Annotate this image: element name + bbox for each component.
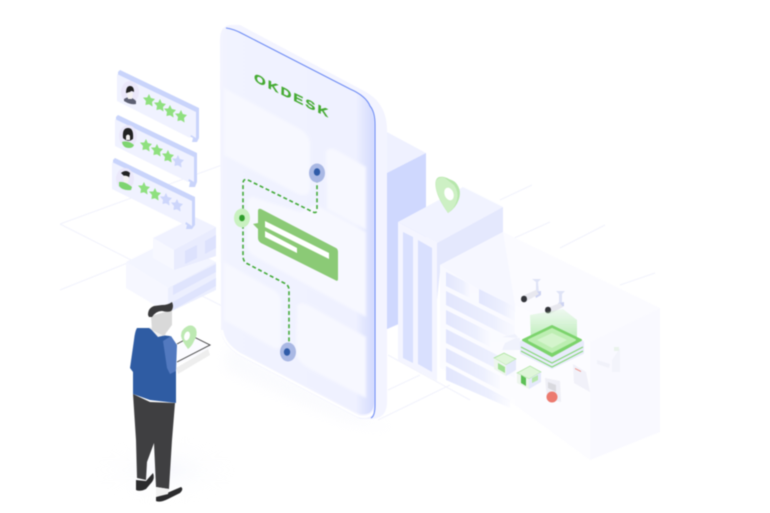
phone white bottom edge (222, 330, 374, 417)
tablet (177, 336, 211, 364)
camera 2 (545, 291, 565, 314)
lower block (126, 240, 216, 313)
sleeve (163, 336, 177, 374)
route pin bottom (280, 342, 296, 362)
dashed route (243, 172, 317, 350)
phone screen (221, 29, 374, 414)
floor shadow under person (95, 434, 235, 506)
phone blue outline (226, 28, 375, 418)
chat bubble (253, 209, 338, 281)
shoe right (156, 487, 182, 502)
review card 2 (115, 115, 197, 187)
review cards (112, 70, 199, 229)
faint wall device (597, 347, 620, 372)
neck (149, 327, 166, 337)
head (151, 310, 172, 336)
arm (176, 349, 210, 374)
person (130, 302, 211, 502)
front building windows (446, 272, 515, 408)
route pin top (309, 164, 325, 182)
floor grid (60, 165, 655, 420)
review card 3 (112, 158, 195, 229)
screen panels (224, 88, 366, 398)
faint wall device 2 (502, 334, 520, 350)
shoe left (136, 473, 154, 491)
security devices (494, 279, 620, 402)
sensor cube 1 (494, 353, 516, 376)
door sensor (573, 364, 590, 392)
hair (148, 302, 173, 317)
phone body outer (220, 25, 387, 419)
green platform device (521, 326, 583, 368)
phone (220, 25, 387, 419)
middle building (398, 187, 503, 381)
front building (440, 232, 660, 460)
review card 1 (117, 70, 199, 142)
floor shadow under phone (225, 345, 395, 430)
alarm siren (545, 378, 561, 402)
hand-held location pin (181, 325, 197, 349)
shirt (130, 328, 176, 403)
translucent server room box (503, 232, 660, 342)
sensor cube 2 (517, 366, 541, 389)
middle building location pin (435, 177, 460, 213)
socks (156, 487, 169, 497)
camera 1 (521, 279, 541, 302)
legs (133, 394, 175, 489)
upper block (153, 217, 216, 270)
route pin left (234, 208, 250, 228)
left building (126, 217, 216, 313)
OKDESK logo: OKDESK (254, 71, 329, 121)
camera beam (530, 309, 577, 342)
back building (385, 131, 426, 330)
